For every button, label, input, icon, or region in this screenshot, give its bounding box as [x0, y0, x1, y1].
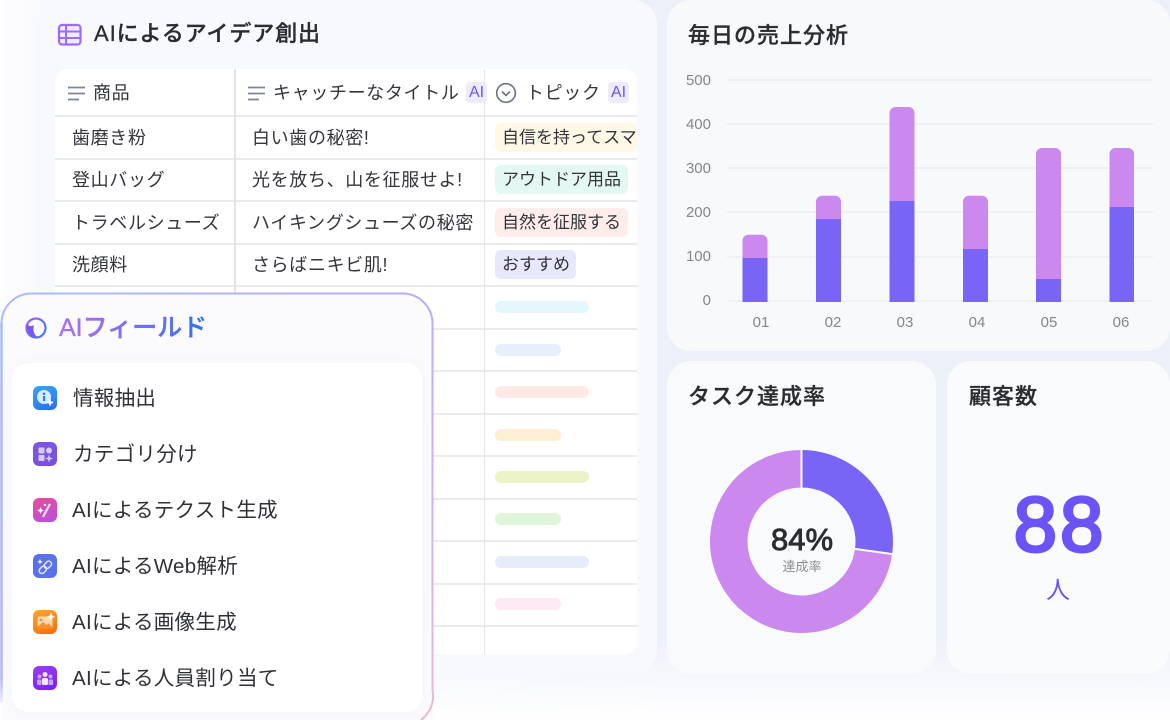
bar chart: 300 — [686, 160, 711, 177]
icon: people — [33, 666, 57, 690]
heading: daily sales analysis: 毎日の売上分析 — [688, 23, 849, 48]
bar chart: 0 — [703, 292, 711, 309]
cell text: さらばニキビ肌! — [252, 255, 388, 275]
list item: AI image generation — [33, 610, 237, 634]
customer number: 88 — [1014, 480, 1106, 568]
list item: categorisation — [33, 442, 198, 466]
bar chart: 05 — [1041, 314, 1057, 331]
bar chart: 04 — [969, 314, 985, 331]
heading: customer count: 顧客数 — [969, 384, 1038, 409]
panel: daily sales analysis — [667, 0, 1170, 351]
tag: outdoor: アウトドア用品 — [502, 170, 621, 189]
bar chart: 100 — [686, 248, 711, 265]
cell text: トラベルシューズ — [72, 213, 220, 233]
cell text: 洗顔料 — [72, 255, 128, 275]
heading: AI idea generation: AIによるアイデア創出 — [94, 21, 321, 46]
bar chart: 02 — [825, 314, 841, 331]
column header: product: 商品 — [93, 83, 130, 103]
icon: table — [58, 24, 82, 46]
icon: image — [33, 610, 57, 634]
icon: AI swirl — [25, 317, 47, 339]
cell text: 登山バッグ — [72, 170, 165, 190]
bar chart: 400 — [686, 116, 711, 133]
AI badge: AI — [611, 84, 626, 101]
panel: AI field list — [12, 363, 422, 712]
label: 情報抽出 — [73, 387, 156, 410]
donut value: 84% — [771, 522, 833, 557]
tag: recommended: おすすめ — [502, 255, 570, 274]
bar chart: 06 — [1113, 314, 1129, 331]
column header: catchy title: キャッチーなタイトル — [273, 83, 460, 103]
AI badge — [608, 82, 629, 103]
label: AIによるテクスト生成 — [72, 499, 278, 522]
placeholder pills — [495, 301, 589, 610]
label: カテゴリ分け — [73, 443, 198, 466]
tag: conquer nature — [495, 208, 628, 237]
table background — [55, 69, 637, 654]
bar chart: 200 — [686, 204, 711, 221]
donut caption: 達成率 — [782, 559, 822, 574]
heading: AI field: AIフィールド — [59, 314, 207, 342]
label: AIによる画像生成 — [72, 611, 237, 634]
cell text: 白い歯の秘密! — [252, 128, 370, 148]
panel: customer count — [947, 361, 1170, 674]
icon: text wand — [33, 498, 57, 522]
tag: outdoor — [495, 165, 628, 194]
panel border — [0, 292, 434, 720]
cell text: 光を放ち、山を征服せよ! — [252, 170, 463, 190]
bar chart: 01 — [753, 314, 769, 331]
bar chart: 500 — [686, 72, 711, 89]
tag: confidence — [495, 123, 637, 152]
list item: AI staff assignment — [33, 666, 279, 690]
customer unit: 人 — [1046, 577, 1070, 604]
icon: column lines 2 — [248, 86, 265, 100]
list item: AI web analysis — [33, 554, 238, 578]
icon: column lines 1 — [68, 86, 85, 100]
label: AIによるWeb解析 — [72, 555, 238, 578]
panel: AI field — [0, 292, 434, 720]
donut chart — [710, 450, 893, 633]
table — [55, 69, 637, 654]
tag: conquer nature: 自然を征服する — [502, 213, 621, 232]
panel background — [36, 0, 657, 674]
icon: link — [33, 554, 57, 578]
bar chart: 03 — [897, 314, 913, 331]
icon: info — [33, 386, 57, 410]
heading: task completion: タスク達成率 — [688, 384, 826, 409]
AI badge — [466, 82, 487, 103]
column header: topic: トピック — [526, 83, 601, 103]
cell text: ハイキングシューズの秘密 — [252, 213, 474, 233]
cell text: 歯磨き粉 — [72, 128, 147, 148]
AI badge: AI — [469, 84, 484, 101]
icon: category — [33, 442, 57, 466]
panel glass background — [1, 293, 433, 720]
list item: AI text generation — [33, 498, 278, 522]
list item: information extraction — [33, 386, 156, 410]
panel: task completion — [667, 361, 936, 674]
icon: dropdown circle — [496, 82, 516, 104]
tag: recommended — [495, 250, 576, 279]
label: AIによる人員割り当て — [72, 667, 279, 690]
bar chart — [686, 72, 1153, 331]
